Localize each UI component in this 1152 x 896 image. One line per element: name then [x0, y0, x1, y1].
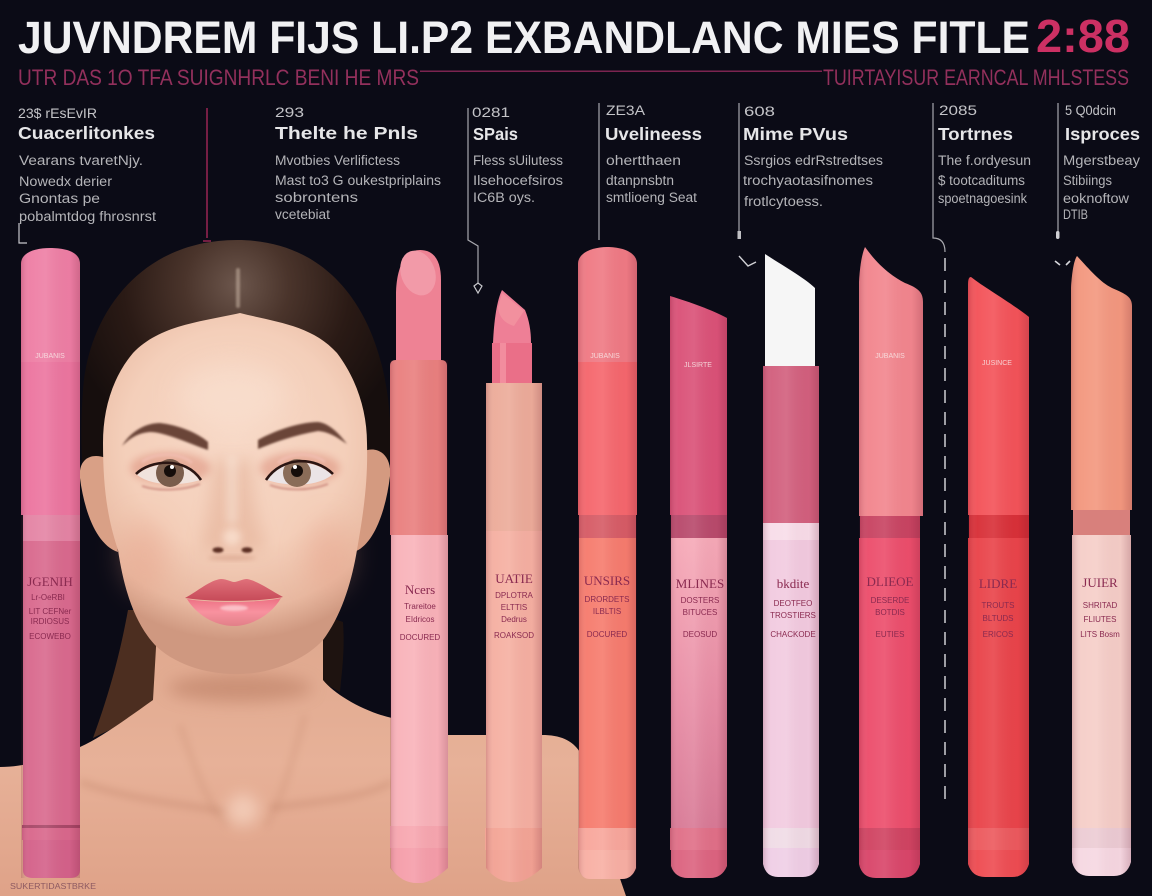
column 7: text	[1055, 103, 1140, 265]
shoulders and neck	[0, 630, 626, 896]
column 1: text: 23$ rEsEvIR	[18, 106, 97, 121]
column 6: text and dashed line: Tortrnes	[938, 124, 1013, 144]
column 4: text: dtanpnsbtn	[606, 173, 674, 188]
column 5: text: Mime PVus	[743, 124, 848, 144]
column 7: text: 5 Q0dcin	[1065, 103, 1116, 118]
column 5: text: frotlcytoess.	[744, 194, 823, 209]
lipstick 6: white tip: bkdite	[777, 576, 809, 591]
column 6: text and dashed line	[933, 103, 1031, 805]
column 7: text: Isproces	[1065, 124, 1140, 144]
lipstick 9: peach flame: FLIUTES	[1084, 615, 1116, 624]
column 3: text and arrow: IC6B oys.	[473, 190, 535, 205]
lipstick 1: closed pink	[21, 248, 80, 878]
column 2: text	[275, 105, 441, 222]
left eye	[130, 452, 210, 490]
column 3: text and arrow: Fless sUilutess	[473, 153, 563, 168]
column 4: text: ZE3A	[606, 103, 645, 118]
lipstick 2: coral bullet: DOCURED	[400, 633, 440, 642]
column 5: text: trochyaotasifnomes	[743, 173, 873, 188]
lipstick 1: closed pink: ECOWEBO	[29, 632, 71, 641]
column 7: text: Stibiings	[1063, 173, 1112, 188]
lipstick 2: coral bullet: Ncers	[405, 582, 435, 597]
column 1: text: pobalmtdog fhrosnrst	[19, 209, 156, 224]
hair strands below jaw	[93, 610, 175, 738]
column 2: text: Thelte he Pnls	[275, 123, 418, 143]
column 4: text: ohertthaen	[606, 153, 681, 168]
column 7: text: eoknoftow	[1063, 191, 1129, 206]
column 4: text: smtlioeng Seat	[606, 190, 697, 205]
blush and contour	[123, 519, 167, 591]
lipstick 6: white tip	[763, 254, 819, 877]
lipstick 6: white tip: CHACKODE	[770, 630, 816, 639]
column 6: text and dashed line: 2085	[939, 103, 977, 118]
lipstick 2: coral bullet: EIdricos	[406, 615, 434, 624]
lipstick 8: red slanted: JUSINCE	[982, 360, 1012, 367]
title: JUVNDREM FIJS LI.P2 EXBANDLANC MIES FITLE	[18, 12, 1030, 63]
lipstick 7: salmon flame: DESERDE	[871, 596, 909, 605]
lipstick 9: peach flame: JUIER	[1082, 575, 1118, 590]
face	[103, 313, 367, 674]
lipstick 4: closed coral: UNSIRS	[584, 573, 630, 588]
lipstick 8: red slanted: TROUTS	[982, 601, 1014, 610]
column 2: text: Mvotbies Verlifictess	[275, 153, 400, 168]
subtitle band	[18, 65, 1129, 90]
lipstick 7: salmon flame: JUBANIS	[875, 353, 905, 360]
lipstick 3: peach bullet: Dedrus	[501, 615, 527, 624]
lipstick 3: peach bullet: ELTTIS	[501, 603, 527, 612]
lipstick 5: rose slanted: MLINES	[676, 576, 724, 591]
column 1: text	[18, 106, 156, 243]
lipstick 1: closed pink: JUBANIS	[35, 353, 65, 360]
column 2: text: Mast to3 G oukestpriplains	[275, 173, 441, 188]
lipstick 9: peach flame: LITS Bosm	[1080, 630, 1120, 639]
column 2: text: 293	[275, 105, 304, 120]
lipstick 4: closed coral: DOCURED	[587, 630, 627, 639]
lipstick 7: salmon flame: DLIEOE	[867, 574, 914, 589]
column 5: text: 608	[744, 104, 775, 119]
column 1: text: Vearans tvaretNjy.	[19, 153, 143, 168]
eyebrows	[122, 422, 347, 450]
column 1: text: Cuacerlitonkes	[18, 123, 155, 143]
column 4: text	[599, 103, 702, 240]
lipstick 9: peach flame: SHRITAD	[1083, 601, 1117, 610]
lipstick 1: closed pink: LIT CEFNer	[29, 607, 72, 616]
ears	[80, 456, 118, 552]
column 5: text: Ssrgios edrRstredtses	[744, 153, 883, 168]
lipstick 5: rose slanted	[670, 296, 727, 878]
lipstick 7: salmon flame: EUTIES	[876, 630, 904, 639]
column 2: text: vcetebiat	[275, 207, 330, 222]
lipstick 6: white tip: DEOTFEO	[774, 599, 812, 608]
lipstick bottom caption: SUKERTIDASTBRKE	[10, 882, 96, 891]
column 3: text and arrow: 0281	[472, 105, 510, 120]
right eye	[260, 452, 340, 489]
column 1: text: Gnontas pe	[19, 191, 100, 206]
column 7: text: DTIB	[1063, 207, 1088, 222]
lipstick 8: red slanted: BLTUDS	[983, 614, 1013, 623]
nose	[200, 455, 266, 560]
lipstick 8: red slanted	[968, 277, 1029, 877]
subtitle band: UTR DAS 1O TFA SUIGNHRLC BENI HE MRS	[18, 65, 419, 90]
column 5: text	[738, 103, 883, 266]
lipstick 9: peach flame	[1071, 256, 1132, 876]
lipstick 7: salmon flame: BOTDIS	[875, 608, 905, 617]
lipstick 5: rose slanted: DOSTERS	[681, 596, 719, 605]
lipstick 8: red slanted: ERICOS	[983, 630, 1013, 639]
lipstick 4: closed coral	[578, 247, 637, 879]
column 6: text and dashed line: spoetnagoesink	[938, 191, 1027, 206]
column 3: text and arrow: Ilsehocefsiros	[473, 173, 563, 188]
column 1: text: Nowedx derier	[19, 174, 113, 189]
divider: pink pointer	[203, 108, 211, 241]
lipstick 2: coral bullet	[390, 246, 448, 883]
column 7: text: Mgerstbeay	[1063, 153, 1140, 168]
lipstick 3: peach bullet: DPLOTRA	[495, 591, 534, 600]
lipstick 6: white tip: TROSTIERS	[770, 611, 816, 620]
lipstick 5: rose slanted: DEOSUD	[683, 630, 717, 639]
column 6: text and dashed line: $ tootcaditums	[938, 173, 1025, 188]
lipstick 1: closed pink: Lr-OeRBI	[31, 593, 65, 602]
lipstick 1: closed pink: IRDIOSUS	[31, 617, 69, 626]
lipstick 8: red slanted: LIDRE	[979, 576, 1017, 591]
lipstick 5: rose slanted: BITUCES	[683, 608, 717, 617]
lipstick 7: salmon flame	[859, 247, 923, 878]
lipstick 1: closed pink: JGENIH	[27, 574, 73, 589]
lipstick 5: rose slanted: JLSIRTE	[684, 362, 712, 369]
lipstick 3: peach bullet: ROAKSOD	[494, 631, 534, 640]
column 2: text: sobrontens	[275, 190, 358, 205]
column 4: text: Uvelineess	[605, 124, 702, 144]
lipstick 4: closed coral: JUBANIS	[590, 353, 620, 360]
hair	[81, 240, 390, 525]
lipstick 4: closed coral: DRORDETS	[585, 595, 629, 604]
portrait of woman	[0, 240, 626, 896]
column 3: text and arrow: SPais	[473, 124, 518, 144]
lipstick 4: closed coral: ILBLTIS	[593, 607, 621, 616]
column 3: text and arrow	[468, 105, 563, 293]
lipstick 2: coral bullet: Trareitoe	[404, 602, 436, 611]
lipstick 3: peach bullet	[485, 290, 542, 882]
column 6: text and dashed line: The f.ordyesun	[938, 153, 1031, 168]
title: 2:88	[1036, 10, 1130, 62]
lipstick 3: peach bullet: UATIE	[495, 571, 533, 586]
lips	[185, 579, 283, 626]
